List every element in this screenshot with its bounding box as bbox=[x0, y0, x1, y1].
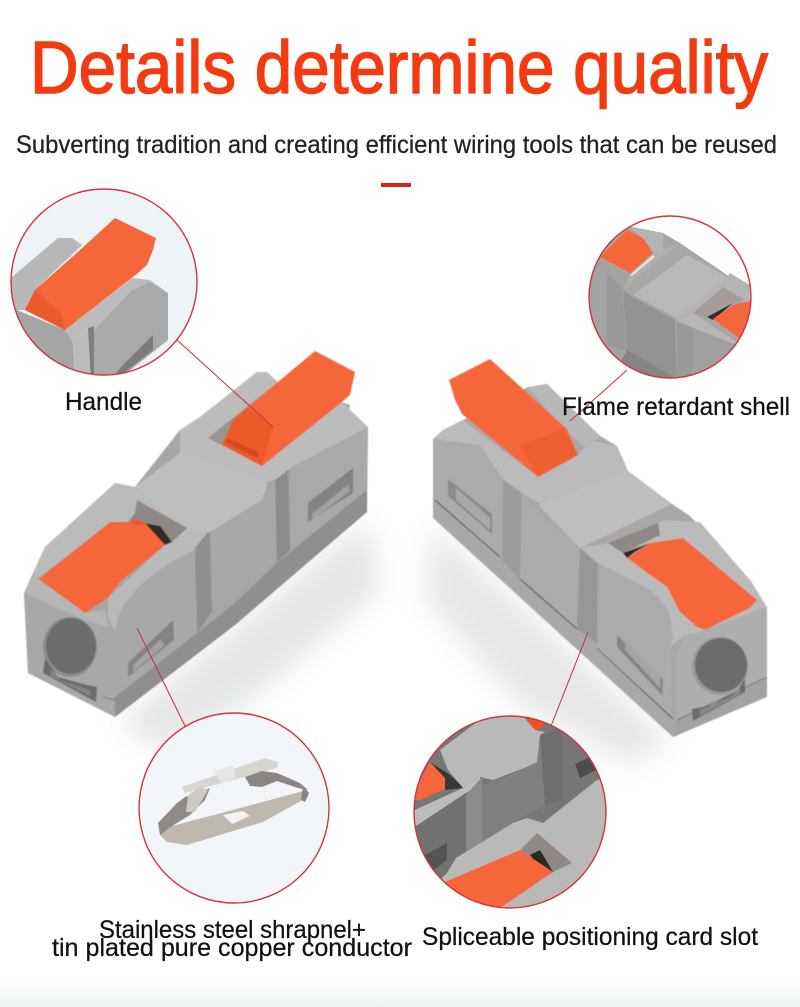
rear window bbox=[308, 468, 353, 522]
lower opening bbox=[128, 500, 187, 542]
top handle bbox=[600, 230, 653, 273]
callout line: flame retardant shell bbox=[570, 370, 627, 421]
lower opening bbox=[608, 523, 660, 553]
label: stainless steel shrapnel bbox=[52, 916, 412, 962]
far collar bbox=[678, 273, 750, 318]
middle side panel bbox=[210, 482, 277, 612]
lower collar bbox=[33, 483, 210, 580]
upper collar bbox=[180, 372, 368, 482]
rear window bbox=[448, 479, 492, 534]
rear side panel bbox=[290, 427, 368, 550]
rear back wall bbox=[528, 384, 600, 447]
orange handle corners bbox=[416, 762, 445, 800]
handle bbox=[25, 218, 156, 330]
right panel bbox=[94, 282, 168, 374]
rim bbox=[65, 278, 168, 343]
lower window bbox=[617, 635, 663, 695]
dark side bbox=[623, 290, 677, 380]
bottom handle bbox=[445, 850, 553, 908]
lower collar bbox=[580, 520, 767, 647]
lower arch panel bbox=[115, 548, 197, 697]
seam lines bbox=[435, 500, 673, 719]
body base bbox=[24, 372, 368, 717]
rear wall bbox=[627, 226, 663, 253]
top light surface bbox=[440, 712, 545, 788]
label: spliceable positioning card slot: Spliceable positioning card slot bbox=[422, 923, 758, 951]
callout line: handle bbox=[177, 340, 273, 427]
panel: flame retardant shell detail circle bbox=[588, 215, 752, 379]
right connector bbox=[433, 359, 767, 737]
label: stainless steel shrapnel: tin plated pure copper conductor bbox=[52, 934, 412, 962]
rear collar rim bbox=[433, 420, 628, 504]
face rim seam bbox=[103, 697, 115, 700]
housing base fill bbox=[600, 226, 750, 377]
collar band bbox=[680, 243, 681, 244]
lower window bbox=[128, 620, 174, 677]
callout line: shrapnel bbox=[137, 628, 185, 726]
panel: shrapnel detail circle bbox=[139, 713, 329, 903]
label: handle: Handle bbox=[65, 388, 142, 416]
back housing bbox=[12, 238, 82, 310]
panel: card slot detail circle bbox=[410, 712, 615, 910]
red accent dash bbox=[381, 183, 411, 187]
bottom strip bbox=[115, 490, 367, 717]
lower arch panel bbox=[597, 563, 673, 717]
groove bbox=[502, 480, 522, 579]
rear arch panel bbox=[433, 435, 503, 562]
grooves bbox=[195, 533, 212, 633]
dark side faces bbox=[416, 793, 466, 826]
lower light collar bbox=[442, 779, 606, 908]
label: stainless steel shrapnel: Stainless steel shrapnel+ bbox=[99, 916, 366, 944]
middle top surface bbox=[135, 453, 268, 533]
opening bbox=[626, 244, 678, 286]
arch rim bbox=[108, 545, 195, 632]
label: flame retardant shell: Flame retardant shell bbox=[562, 393, 790, 421]
floor reflection: right connector bbox=[425, 525, 672, 765]
end face bbox=[24, 593, 115, 717]
middle side panel bbox=[520, 493, 597, 629]
subtitle: Subverting tradition and creating efficient wiring tools that can be reused bbox=[16, 131, 777, 159]
lower front bbox=[16, 310, 74, 370]
left panels bbox=[585, 258, 640, 400]
rear handle bbox=[449, 359, 578, 477]
upper handle bbox=[222, 351, 355, 466]
shrapnel metal clip bbox=[158, 758, 309, 845]
top surface bbox=[633, 255, 727, 318]
lower handle bbox=[627, 538, 757, 630]
left connector bbox=[24, 351, 368, 717]
callout line: card slot bbox=[551, 632, 588, 726]
lower side parts bbox=[676, 313, 736, 344]
end face bbox=[677, 607, 767, 720]
middle top surface bbox=[538, 471, 672, 548]
wire hole bbox=[43, 617, 97, 677]
wire notch bbox=[692, 678, 745, 721]
far handle bbox=[713, 301, 750, 338]
wire hole bbox=[692, 637, 748, 695]
wire notch bbox=[43, 658, 97, 702]
lower handle bbox=[35, 522, 165, 613]
panel: handle detail circle bbox=[10, 188, 198, 376]
floor reflection: left connector bbox=[120, 520, 380, 750]
body base bbox=[433, 384, 767, 737]
